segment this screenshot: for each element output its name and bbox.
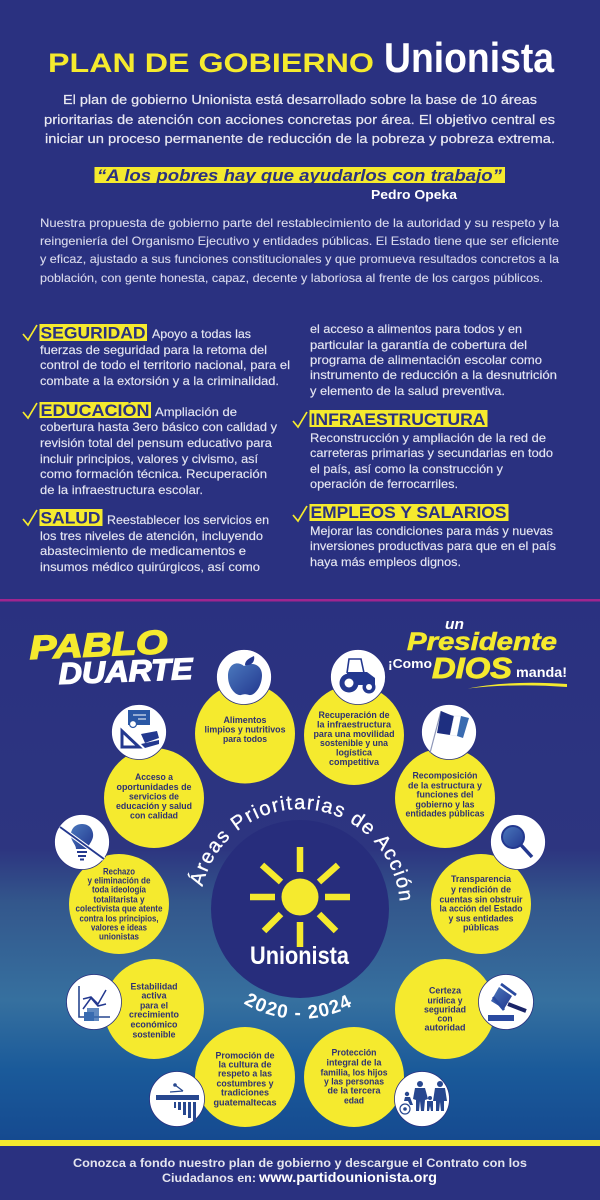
area: rechazo [54,814,169,954]
area: transparencia: públicas [463,922,499,932]
section: salud: abastecimiento de medicamentos e [40,544,246,558]
footer panel [0,1146,600,1200]
area: proteccion: edad [344,1096,364,1106]
slogan: ¡Como [388,656,432,671]
area: recomposicion: Recomposición [412,770,478,780]
area: recomposicion: funciones del [416,790,474,800]
proposal paragraph: población, con gente honesta, capaz, decente y laboriosa al frente de los cargos públicos. [40,271,543,285]
area: infraestructura: Recuperación de [318,710,390,720]
years: 2020 - 2024 [244,994,352,1019]
section: salud: el acceso a alimentos para todos y en [310,322,522,336]
area: proteccion: Protección [332,1048,377,1058]
area: infraestructura: logística [336,748,373,758]
slogan: un [445,616,464,633]
area: recomposicion: gobierno y las [416,800,474,810]
section: educacion: revisión total del pensum educativo para [40,436,272,450]
section: salud [23,322,557,574]
section: empleos y salarios: inversiones productivas para que en el país [310,539,556,553]
area: rechazo: contra los principios, [80,914,158,924]
quote [94,166,505,202]
area: estabilidad: para el [140,1000,168,1010]
area: estabilidad: crecimiento [129,1010,179,1020]
area: alimentos: para todos [223,734,267,744]
magenta divider [0,599,600,602]
section: seguridad: SEGURIDAD [40,324,146,342]
central emblem: Unionista [250,942,350,970]
section: salud: particular la garantía de cobertura del [310,338,527,352]
area: promocion: tradiciones [221,1088,269,1098]
area: rechazo: Rechazo [103,866,135,876]
area: certeza: urídica y [428,996,463,1006]
section: seguridad: control de todo el territorio nacional, para el [40,358,290,372]
curved title: Áreas Prioritarias de Acción [188,796,412,901]
section: infraestructura [293,410,553,491]
section: educacion: cobertura hasta 3ero básico con calidad y [40,420,277,434]
title: PLAN DE GOBIERNO [48,48,374,78]
area: rechazo: valores e ideas [91,922,147,932]
area: promocion: respeto a las [218,1068,272,1078]
area: estabilidad: sostenible [132,1030,176,1040]
section: infraestructura: Reconstrucción y ampliación de la red de [310,431,546,445]
footer panel: Conozca a fondo nuestro plan de gobierno y descargue el Contrato con los [73,1156,527,1170]
area: acceso: servicios de [129,792,179,802]
area: rechazo: unionistas [99,932,139,942]
candidate name: DUARTE [58,653,194,691]
slogan: manda! [516,664,567,680]
area: certeza [395,959,534,1059]
area: alimentos: limpios y nutritivos [204,724,286,734]
area: transparencia: y sus entidades [448,914,514,924]
section: empleos y salarios: haya más empleos dignos. [310,555,461,569]
quote: “A los pobres hay que ayudarlos con trabajo” [97,166,503,185]
intro paragraph: El plan de gobierno Unionista está desarrollado sobre la base de 10 áreas [63,92,538,107]
section: empleos y salarios [293,504,556,569]
area: transparencia: Transparencia [451,874,512,884]
area: promocion [150,1027,295,1127]
area: transparencia: cuentas sin obstruir [440,894,523,904]
central emblem [211,820,389,998]
footer panel: www.partidounionista.org [258,1170,437,1185]
area: acceso: Acceso a [135,772,174,782]
section: educacion: como formación técnica. Recuperación [40,467,267,481]
yellow footer bar [0,1140,600,1146]
area: estabilidad [66,959,204,1059]
section: educacion: de la infraestructura escolar. [40,483,203,497]
candidate name [29,623,194,691]
section: seguridad: fuerzas de seguridad para la retoma del [40,343,267,357]
area: recomposicion: entidades públicas [406,808,484,818]
section: seguridad [23,324,290,388]
area: recomposicion [395,704,495,848]
lower gradient background [0,600,600,1140]
section: salud: insumos médico quirúrgicos, así como [40,560,260,574]
section: salud: Reestablecer los servicios en [107,513,269,527]
area: proteccion: de la tercera [328,1086,381,1096]
area: estabilidad: activa [142,990,167,1000]
area: proteccion: integral de la [326,1058,382,1068]
area: infraestructura: sostenible y una [320,738,389,748]
intro paragraph: prioritarias de atención con acciones concretas por área. El objetivo central es [44,112,556,127]
area: alimentos: Alimentos [224,715,266,725]
area: acceso: con calidad [130,810,178,820]
quote: Pedro Opeka [371,188,458,202]
section: infraestructura: carreteras primarias y secundarias en todo [310,446,553,460]
area: alimentos [195,650,295,784]
section: educacion: Ampliación de [155,405,237,419]
area: certeza: con [438,1014,453,1024]
proposal paragraph: reingeniería del Organismo Ejecutivo y entidades públicas. El Estado tiene que ser eficiente [40,234,559,248]
area: infraestructura: competitiva [329,757,380,767]
area: promocion: guatemaltecas [214,1098,276,1108]
section: infraestructura: operación de ferrocarriles. [310,477,458,491]
section: educacion [23,401,277,497]
footer panel: Ciudadanos en: [162,1171,256,1185]
candidate name: PABLO [29,623,169,666]
area: rechazo: toda ideología [92,884,147,894]
area: certeza: Certeza [429,986,462,996]
area: certeza: seguridad [424,1004,466,1014]
section: salud: instrumento de reducción a la desnutrición [310,368,557,382]
section: seguridad: Apoyo a todas las [152,327,251,341]
area: estabilidad: Estabilidad [130,982,178,992]
title: Unionista [384,34,555,81]
area: infraestructura: la infraestructura [317,720,392,730]
area: transparencia [431,814,546,954]
section: salud: y elemento de la salud preventiva. [310,384,505,398]
area: estabilidad: económico [130,1020,178,1030]
proposal paragraph: Nuestra propuesta de gobierno parte del restablecimiento de la autoridad y su respeto y la [40,216,559,230]
intro paragraph: iniciar un proceso permanente de reducción de la pobreza y pobreza extrema. [45,131,555,146]
section: salud: los tres niveles de atención, incluyendo [40,529,263,543]
area: acceso: educación y salud [116,801,192,811]
section: empleos y salarios: EMPLEOS Y SALARIOS [310,504,506,522]
section: infraestructura: el país, así como la construcción y [310,462,503,476]
area: transparencia: la acción del Estado [440,904,523,914]
proposal paragraph [40,216,559,285]
area: rechazo: y eliminación de [88,876,150,886]
area: promocion: Promoción de [216,1050,274,1060]
area: rechazo: totalitarista y [94,894,145,904]
slogan: Presidente [407,628,557,656]
section: seguridad: combate a la extorsión y a la criminalidad. [40,374,279,388]
area: promocion: costumbres y [216,1078,274,1088]
area: proteccion: familia, los hijos [320,1068,388,1078]
section: infraestructura: INFRAESTRUCTURA [310,411,486,429]
section: educacion: incluir principios, valores y civismo, así [40,452,259,466]
section: salud: programa de alimentación escolar como [310,353,542,367]
section: empleos y salarios: Mejorar las condiciones para más y nuevas [310,524,553,538]
intro paragraph [44,92,556,146]
proposal paragraph: y eficaz, ajustado a sus funciones constitucionales y que promueva resultados concretos a la [40,252,559,266]
area: proteccion: y las personas [324,1076,384,1086]
area: proteccion [304,1027,450,1127]
slogan: DIOS [432,653,513,685]
area: infraestructura [304,650,404,785]
slogan [388,616,567,688]
area: recomposicion: de la estructura y [408,780,483,790]
area: rechazo: colectivista que atente [76,904,162,914]
area: infraestructura: para una movilidad [314,729,394,739]
section: educacion: EDUCACIÓN [40,401,150,420]
area: acceso [104,704,204,848]
area: acceso: oportunidades de [116,782,192,792]
area: transparencia: y rendición de [451,884,511,894]
section: salud: SALUD [40,510,101,528]
area: promocion: la cultura de [218,1060,272,1070]
area: certeza: autoridad [424,1022,466,1032]
title [48,34,555,81]
